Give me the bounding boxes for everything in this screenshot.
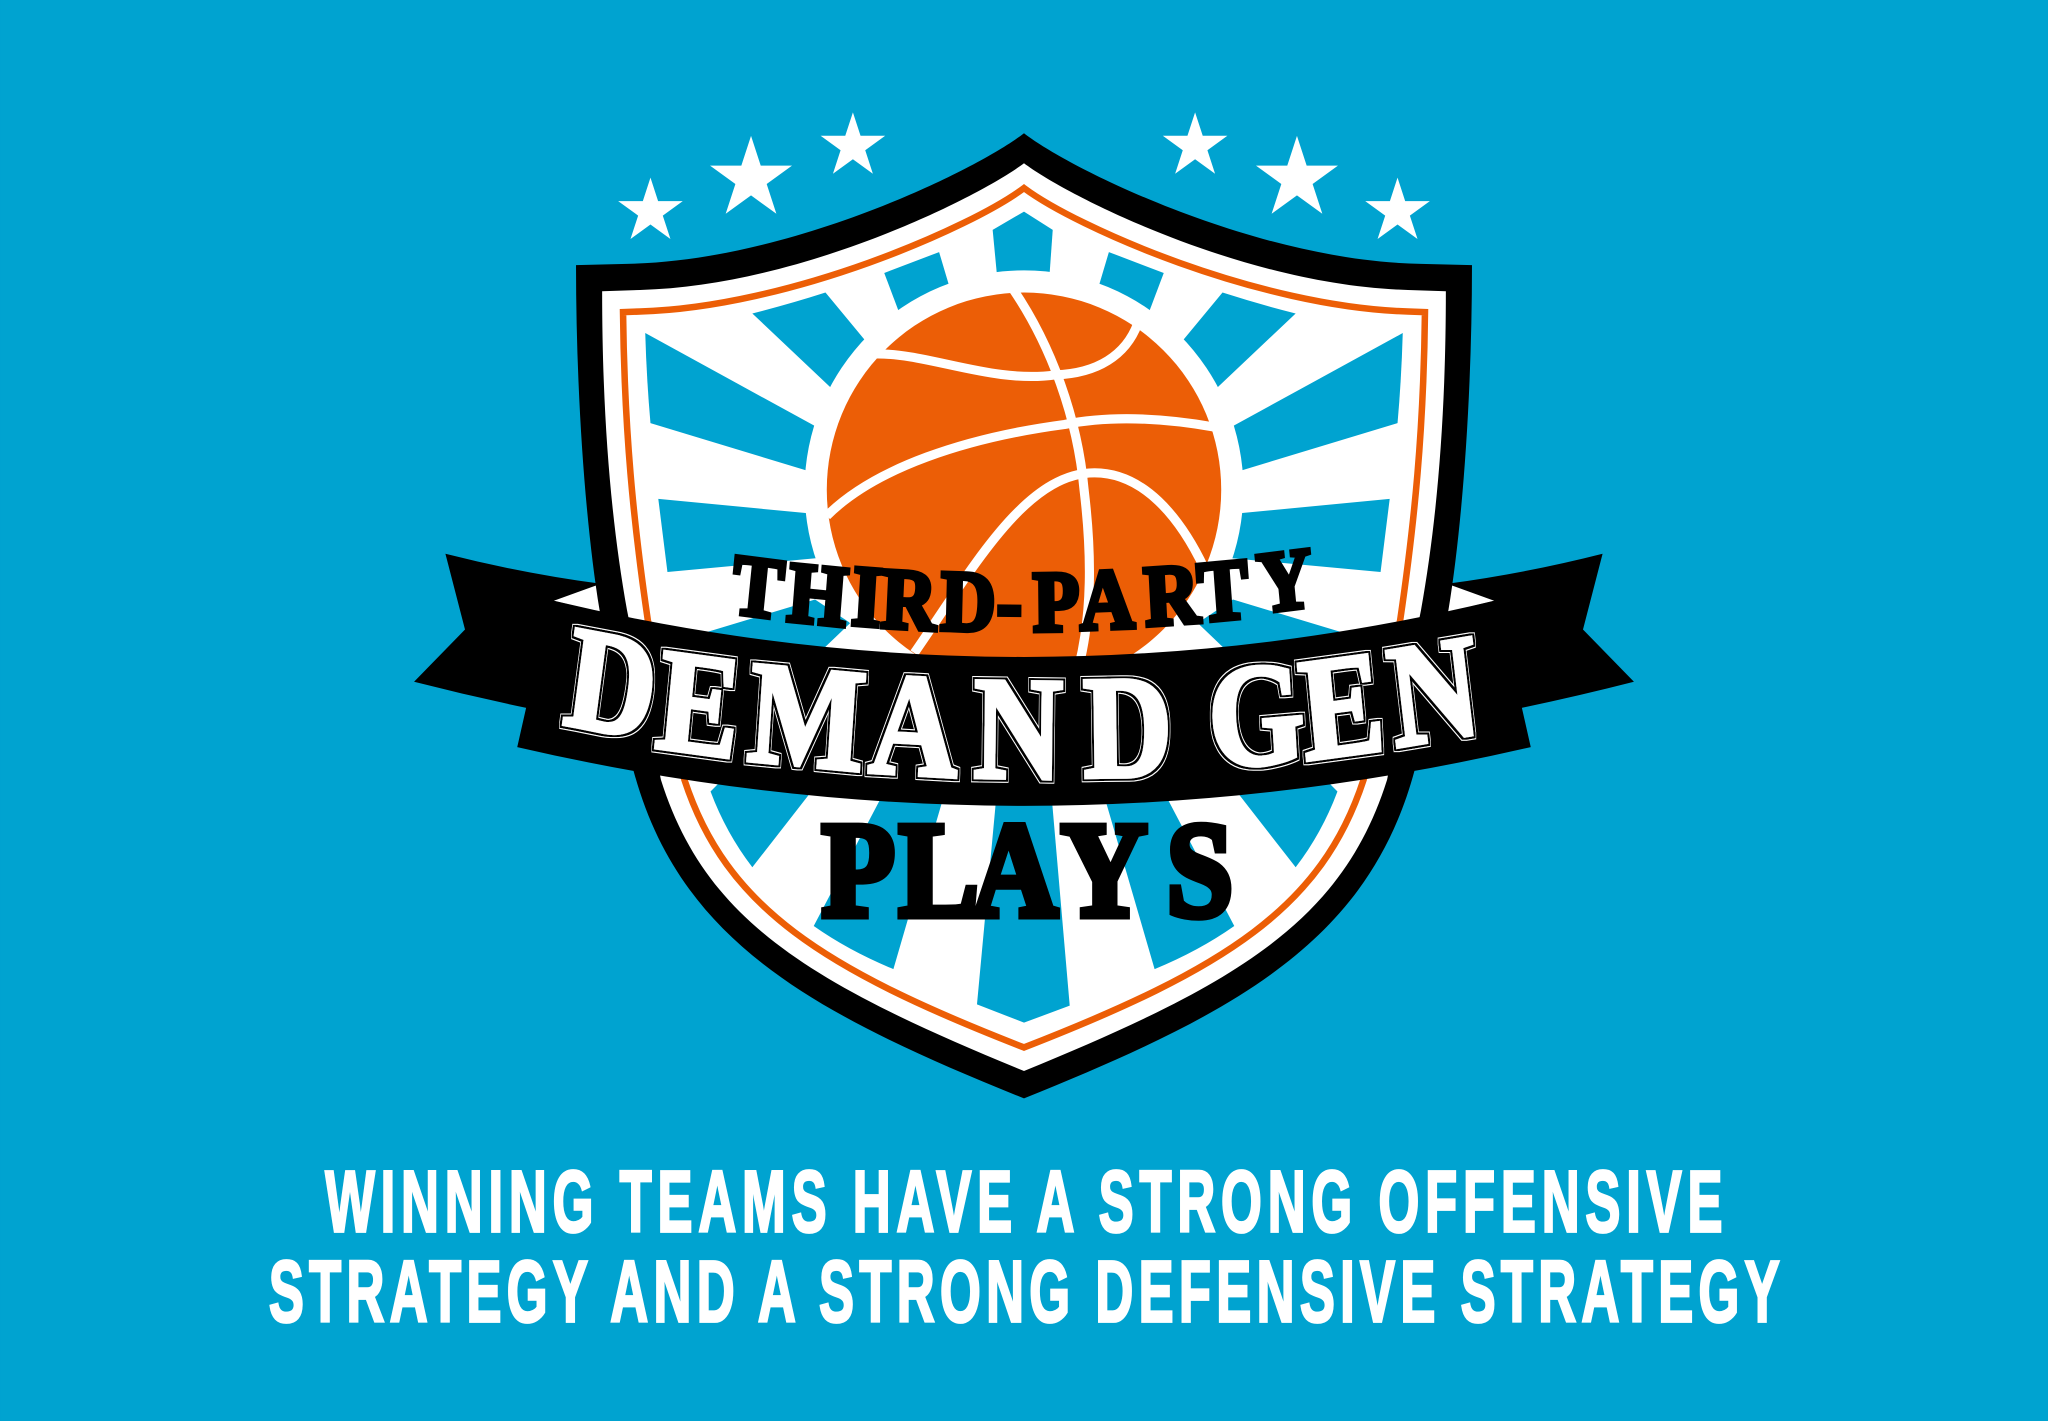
- tagline line 2: STRATEGY AND A STRONG DEFENSIVE STRATEGY: [269, 1244, 1780, 1341]
- basketball: [827, 290, 1221, 687]
- ball body: [827, 293, 1221, 687]
- stars: left group: [618, 112, 885, 239]
- stars: right group: [1163, 112, 1430, 239]
- shield orange inner line: [623, 188, 1425, 1047]
- ball seams: [827, 290, 1215, 666]
- tagline: [269, 1154, 1780, 1341]
- shield white field: [602, 163, 1446, 1071]
- heading: demand gen: DEMAND GEN: [557, 596, 1487, 811]
- ribbon tails: [414, 554, 1634, 718]
- sunburst blue panels: [645, 212, 1403, 1023]
- tagline line 1: WINNING TEAMS HAVE A STRONG OFFENSIVE: [325, 1154, 1722, 1251]
- shield: [576, 133, 1472, 1098]
- ribbon main band: [517, 601, 1531, 806]
- heading: plays: PLAYS: [822, 795, 1233, 945]
- shield outer black border: [576, 133, 1472, 1098]
- heading: third-party: THIRD-PARTY: [728, 530, 1317, 650]
- basketball rim: [805, 270, 1243, 709]
